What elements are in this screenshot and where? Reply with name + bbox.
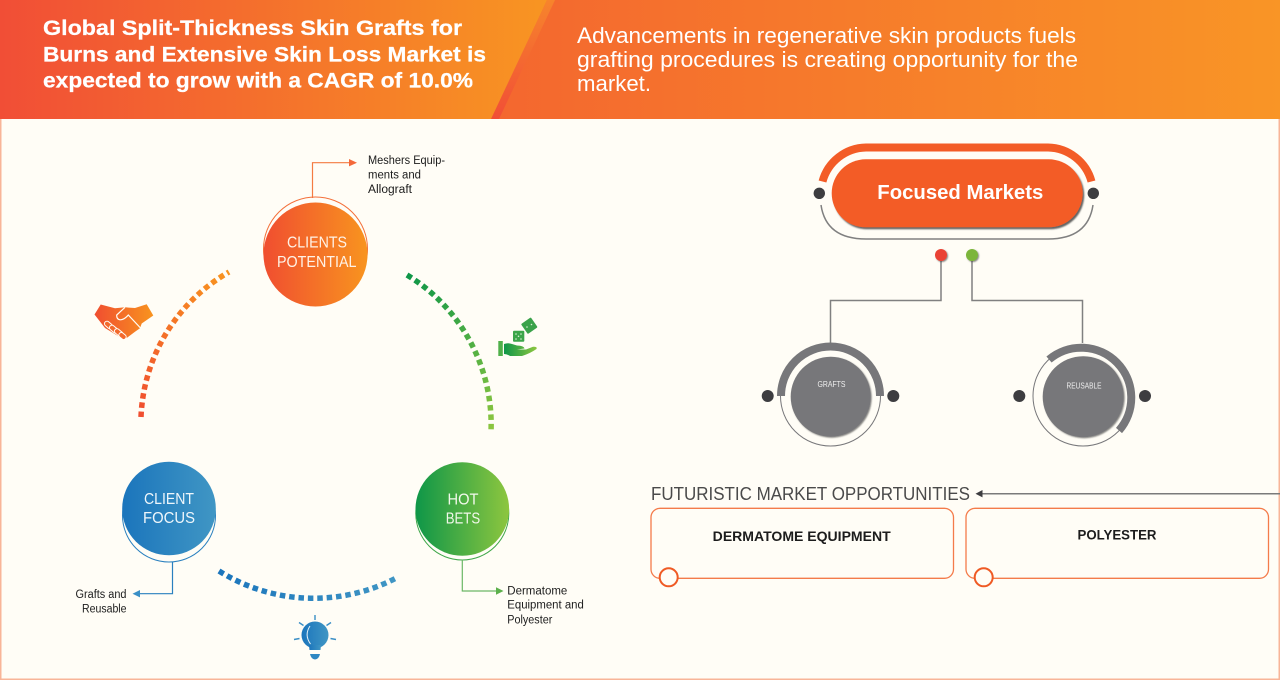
card marker [975, 568, 993, 586]
circle label: FOCUS [143, 510, 195, 527]
card: dermatome equipment [651, 508, 954, 586]
lower arc [821, 205, 1093, 239]
card: polyester [966, 508, 1268, 586]
card label: DERMATOME EQUIPMENT [713, 529, 891, 544]
connector: grafts [830, 261, 941, 343]
disc [1043, 356, 1124, 437]
title: Burns and Extensive Skin Loss Market is [43, 42, 486, 66]
circle [416, 462, 509, 556]
pill [832, 159, 1083, 227]
clients potential node [264, 155, 445, 306]
connector arrow [312, 159, 357, 198]
right dot [1088, 188, 1099, 199]
header slanted band [491, 0, 555, 119]
right dot [887, 390, 899, 402]
circle label: CLIENT [144, 491, 194, 508]
title: expected to grow with a CAGR of 10.0% [43, 68, 473, 92]
description: Polyester [507, 614, 552, 626]
outer ring [416, 467, 509, 560]
thick arc [781, 346, 880, 396]
header description: Advancements in regenerative skin products fuels [577, 23, 1076, 48]
header description: market. [577, 71, 651, 96]
dotted arc: blue [219, 571, 398, 598]
label: GRAFTS [818, 380, 846, 389]
description: ments and [368, 170, 421, 182]
thick arc [1049, 348, 1131, 430]
header description [577, 23, 1078, 96]
circle [264, 202, 368, 306]
left dot [1013, 390, 1025, 402]
circle [122, 462, 216, 555]
label: REUSABLE [1066, 382, 1102, 390]
description: Meshers Equip- [368, 155, 445, 167]
card box [651, 508, 954, 578]
circle label: POTENTIAL [277, 254, 357, 271]
header right background [0, 0, 1280, 119]
card label: POLYESTER [1078, 528, 1157, 543]
description: Reusable [82, 603, 126, 615]
pill label: Focused Markets [877, 182, 1043, 204]
header description: grafting procedures is creating opportunity for the [577, 47, 1078, 72]
arrow to heading [976, 490, 1280, 497]
connector: reusable [972, 261, 1082, 343]
red dot [935, 249, 947, 261]
outer ring [264, 197, 368, 301]
title [43, 16, 486, 92]
dotted arc: green [407, 275, 491, 432]
header left panel [0, 0, 547, 119]
disc [791, 357, 871, 437]
left dot [762, 390, 774, 402]
header banner [0, 0, 1280, 119]
futuristic heading: FUTURISTIC MARKET OPPORTUNITIES [651, 483, 970, 504]
client focus node [76, 462, 216, 615]
dotted arc: orange [141, 272, 229, 417]
circle label: HOT [448, 491, 479, 508]
reusable node [1013, 346, 1151, 446]
description [368, 155, 445, 196]
thin ring [1033, 346, 1133, 446]
outer ring [122, 469, 216, 562]
left dot [814, 188, 825, 199]
description: Allograft [368, 184, 413, 196]
hot bets node [416, 462, 584, 626]
thin ring [780, 346, 880, 446]
upper arc [822, 148, 1092, 182]
title: Global Split-Thickness Skin Grafts for [43, 16, 463, 40]
circle label [277, 235, 357, 271]
circle label: CLIENTS [287, 235, 347, 252]
description: Grafts and [76, 589, 126, 601]
description [507, 585, 584, 626]
icon: handshake [94, 304, 153, 340]
connector arrow [462, 560, 504, 595]
icon: hand with dice [498, 317, 538, 356]
card marker [660, 568, 678, 586]
circle label: BETS [446, 510, 480, 527]
green dot [966, 249, 978, 261]
description: Dermatome [507, 585, 567, 597]
right dot [1139, 390, 1151, 402]
description [76, 589, 126, 615]
circle label [143, 491, 195, 527]
grafts node [762, 346, 899, 446]
icon: light bulb [294, 615, 336, 660]
card box [966, 508, 1268, 578]
connector arrow [132, 562, 172, 597]
description: Equipment and [507, 600, 584, 612]
focused markets header [814, 148, 1099, 239]
circle label [446, 491, 480, 527]
